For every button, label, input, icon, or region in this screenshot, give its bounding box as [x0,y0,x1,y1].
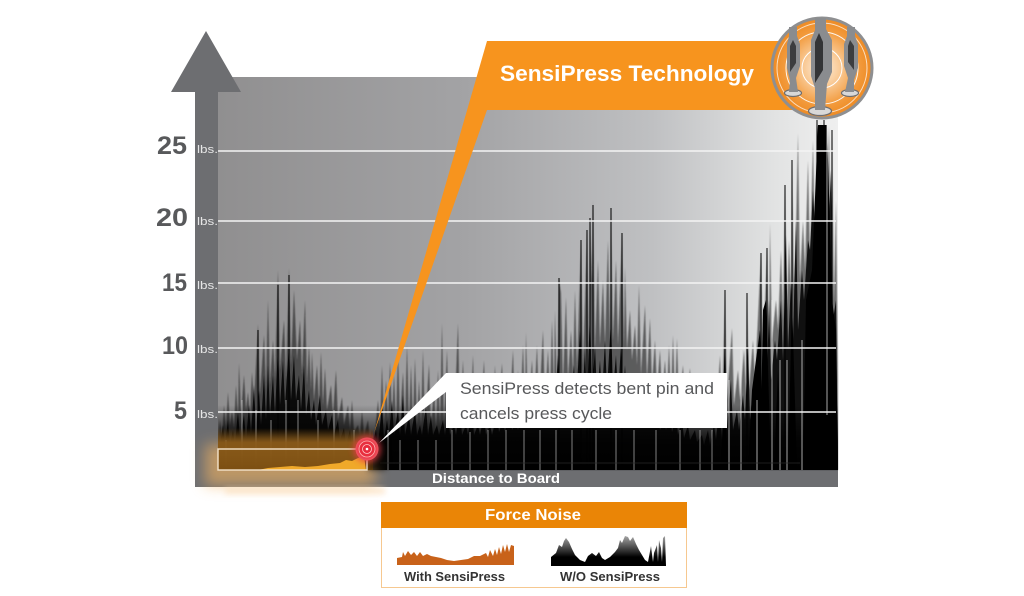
orange glow behind SensiPress zone [205,428,386,486]
y axis labels: 15 [162,269,187,297]
legend: Force Noise: Force Noise [485,507,581,524]
legend label: without SensiPress: W/O SensiPress [560,570,660,584]
y axis labels: lbs. [197,280,218,292]
y axis labels: lbs. [197,344,218,356]
SensiPress zone outline [218,449,367,470]
orange glow under axis [225,488,385,494]
y axis labels: lbs. [197,144,218,156]
banner: SensiPress Technology [374,41,800,433]
legend label: with SensiPress: With SensiPress [404,570,505,584]
y axis labels: 20 [156,204,188,232]
y axis arrow [171,31,241,470]
y axis labels: lbs. [197,409,218,421]
x axis label: Distance to Board [432,471,560,486]
y axis labels: 25 [157,132,187,160]
grid lines [218,151,836,412]
legend chart: without SensiPress [551,536,666,566]
callout pointer [379,373,446,443]
y axis labels: 10 [162,332,188,360]
plot background [218,77,838,470]
legend: Force Noise [381,502,687,588]
banner: SensiPress Technology: SensiPress Technology [500,61,755,86]
y axis labels [156,132,218,425]
callout box: SensiPress detects bent pin and [460,379,714,398]
legend chart: with SensiPress [397,544,514,565]
callout box [446,373,727,428]
force noise spikes without SensiPress [218,120,838,470]
SensiPress force trace [258,456,366,470]
y axis labels: 5 [174,397,187,425]
icon: press-fit pins [772,18,872,118]
y axis labels: lbs. [197,216,218,228]
target marker [353,435,381,463]
callout box: cancels press cycle [460,404,612,423]
x axis band [195,470,838,487]
